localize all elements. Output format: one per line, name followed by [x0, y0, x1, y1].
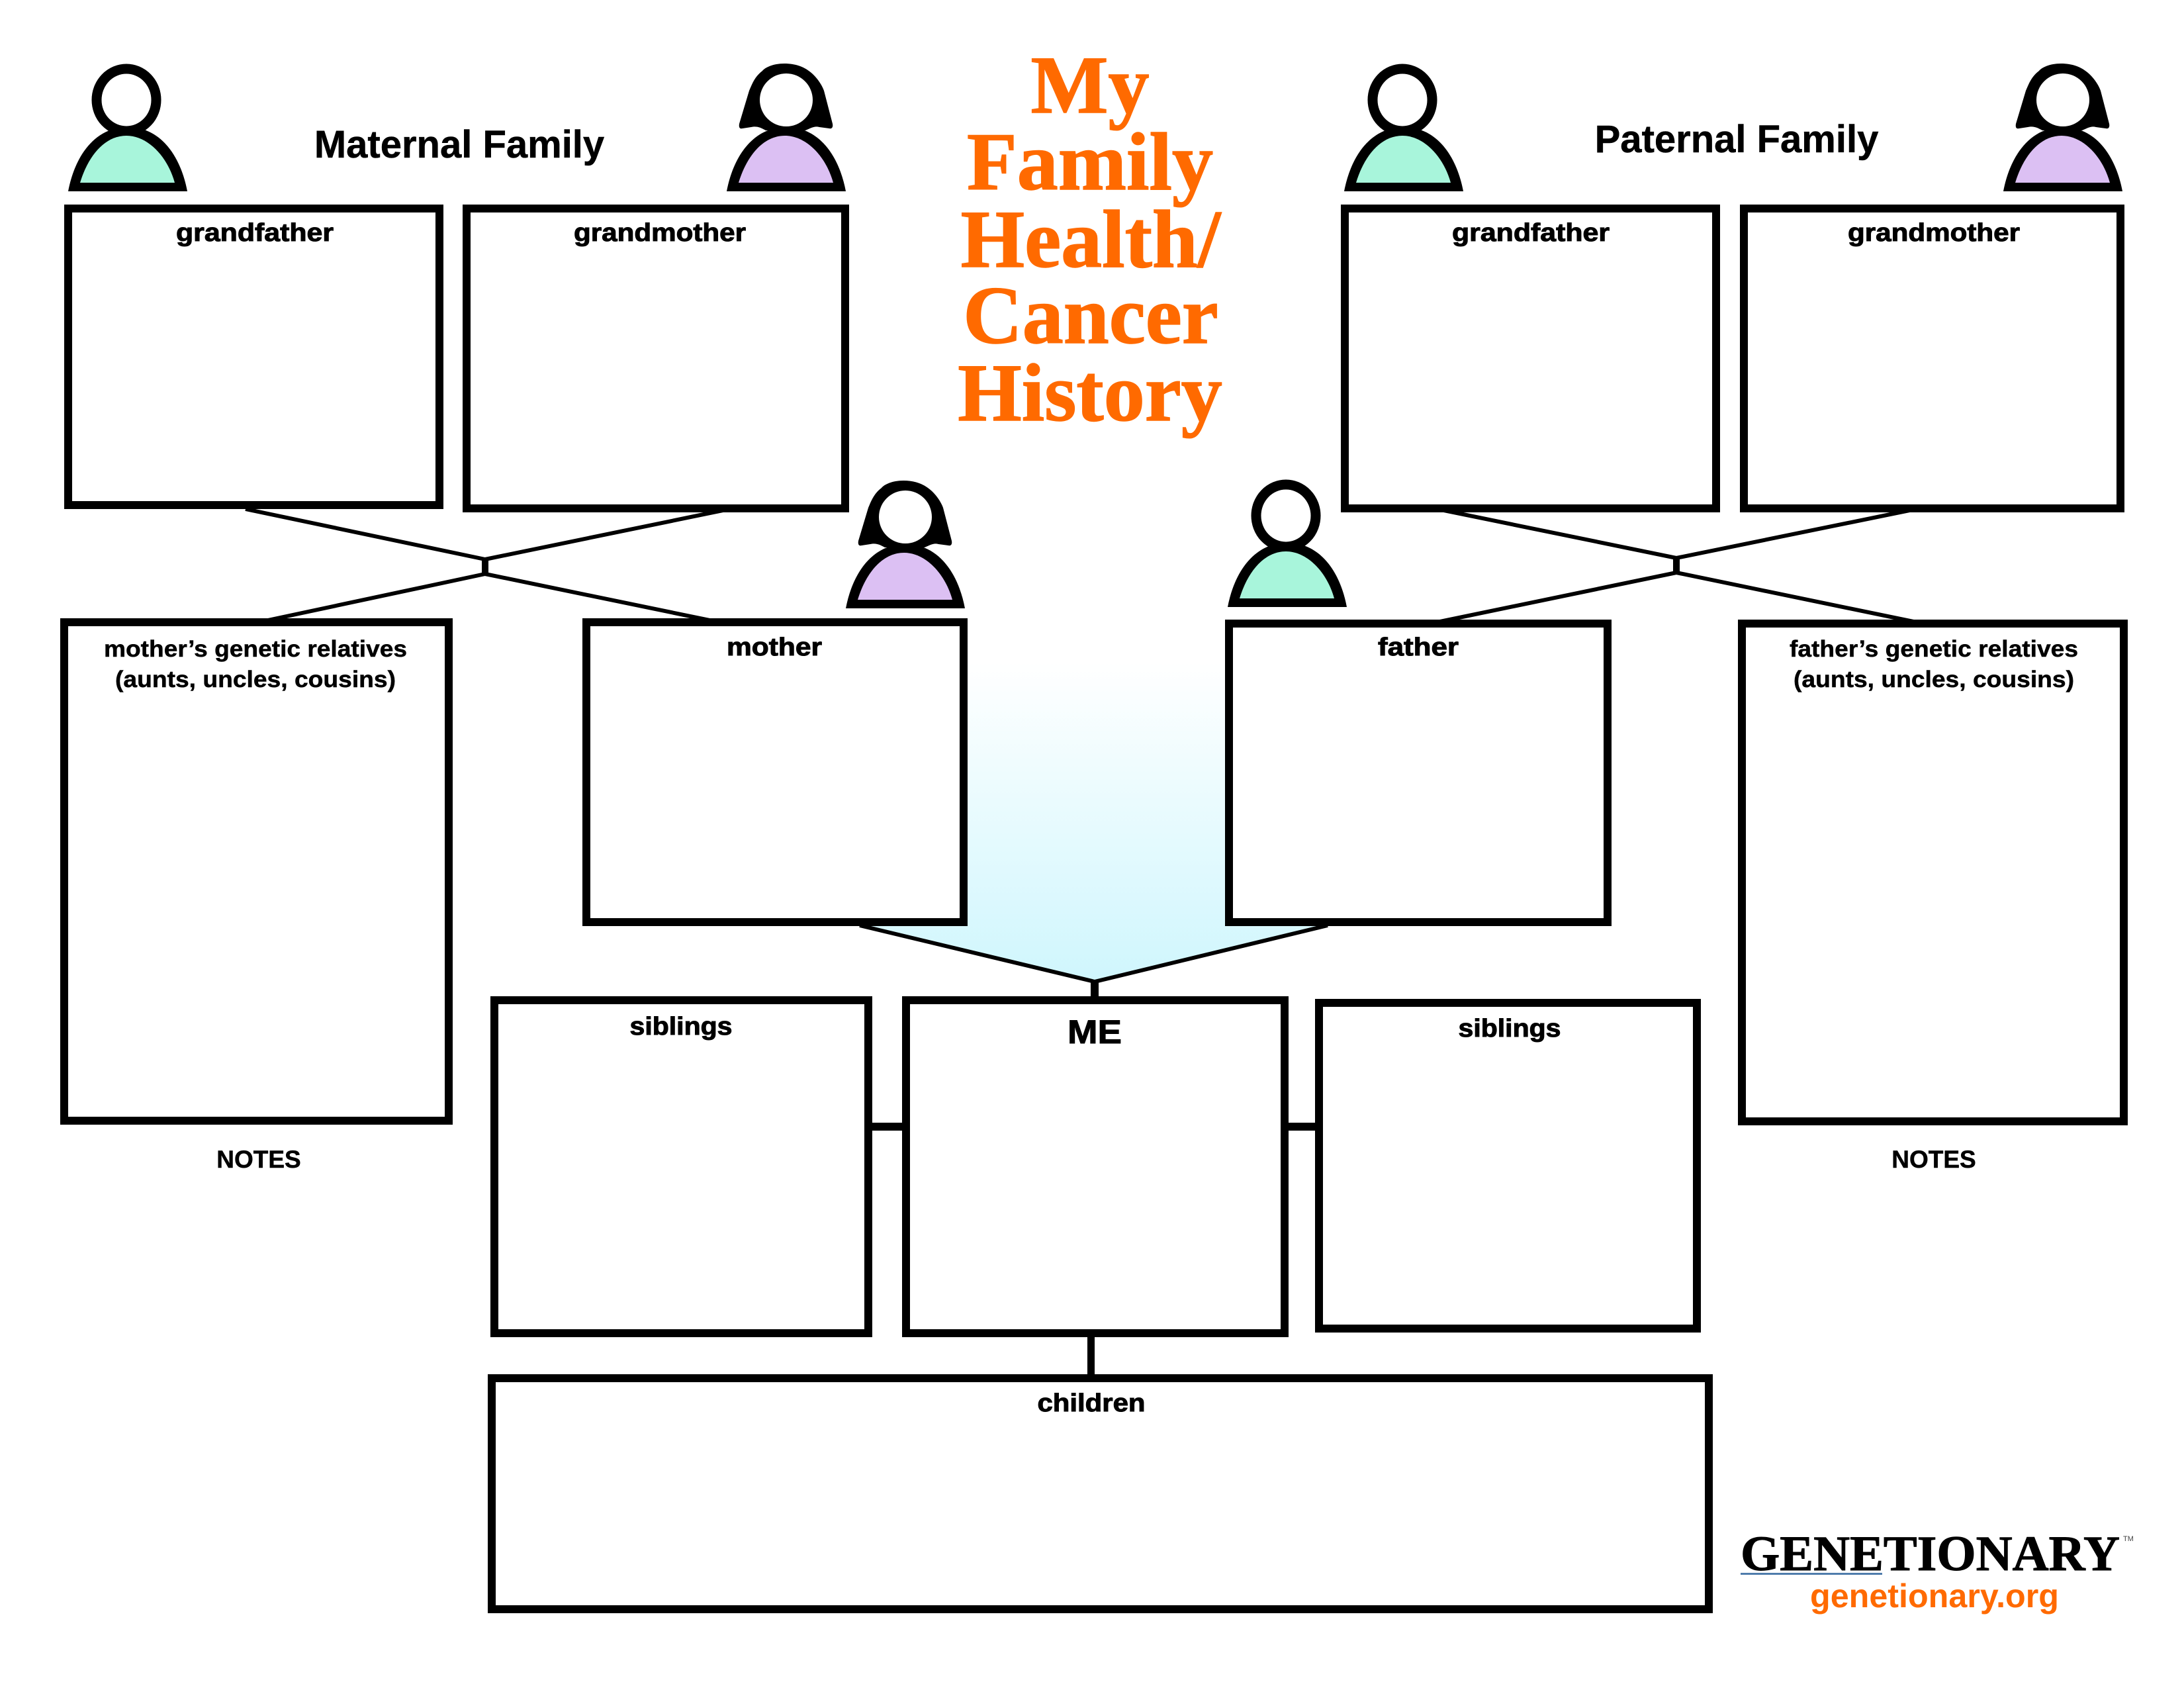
panel: maternal grandmother [467, 209, 845, 508]
panel: siblings left: siblings [630, 1013, 732, 1041]
title: Cancer [963, 270, 1218, 361]
logo: genetionary: genetionary.org [1810, 1577, 2059, 1615]
panel: mother's genetic relatives: (aunts, uncles, cousins) [115, 667, 396, 692]
panel: paternal grandfather [1345, 209, 1716, 508]
panel: father: father [1378, 633, 1459, 661]
panel: mother: mother [727, 633, 822, 661]
icon: father [1228, 485, 1347, 607]
panel: mother's genetic relatives [64, 622, 449, 1121]
icon: paternal grandfather [1344, 69, 1463, 191]
panel: paternal grandmother [1744, 209, 2120, 508]
logo: genetionary: TM [2123, 1535, 2134, 1543]
sibling connector right [1284, 1123, 1317, 1131]
heading: paternal family: Paternal Family [1595, 118, 1878, 161]
heading: maternal family: Maternal Family [314, 123, 604, 166]
panel: me: ME [1068, 1013, 1122, 1051]
logo: genetionary [1741, 1526, 2134, 1615]
paternal connector cross [1434, 508, 1919, 622]
panel: me [906, 1000, 1285, 1333]
panel: mother's genetic relatives: mother’s genetic relatives [104, 636, 407, 662]
icon: paternal grandmother [2003, 64, 2122, 191]
maternal connector cross [246, 509, 729, 621]
panel: father's genetic relatives: father’s genetic relatives [1790, 636, 2078, 662]
panel: children: children [1038, 1389, 1145, 1417]
panel: paternal grandfather: grandfather [1452, 219, 1610, 247]
title: Family [967, 117, 1213, 207]
panel: maternal grandmother: grandmother [574, 219, 746, 247]
icon: maternal grandmother [727, 64, 846, 191]
panel: father's genetic relatives: (aunts, uncles, cousins) [1794, 667, 2074, 692]
panel: children [492, 1378, 1709, 1609]
panel: maternal grandfather [68, 209, 439, 505]
panel: father's genetic relatives [1742, 624, 2124, 1121]
panel: maternal grandfather: grandfather [176, 219, 334, 247]
me to children connector [1087, 1335, 1095, 1380]
sibling connector left [868, 1123, 904, 1131]
icon: maternal grandfather [68, 69, 187, 191]
gradient arrow background [860, 662, 1328, 981]
panel: siblings right [1319, 1003, 1697, 1329]
panel: siblings left [494, 1000, 868, 1333]
title: Health/ [961, 194, 1222, 285]
logo: genetionary: GENETIONARY [1741, 1526, 2120, 1581]
icon: mother [846, 481, 965, 608]
title: My [1030, 40, 1150, 130]
note label: maternal: NOTES [216, 1146, 301, 1173]
parents to me connector [860, 925, 1328, 998]
note label: paternal: NOTES [1891, 1146, 1976, 1173]
panel: siblings right: siblings [1459, 1015, 1561, 1043]
title [958, 40, 1222, 438]
panel: mother [586, 622, 964, 922]
panel: father [1229, 624, 1608, 922]
title: History [958, 348, 1222, 438]
panel: paternal grandmother: grandmother [1848, 219, 2020, 247]
